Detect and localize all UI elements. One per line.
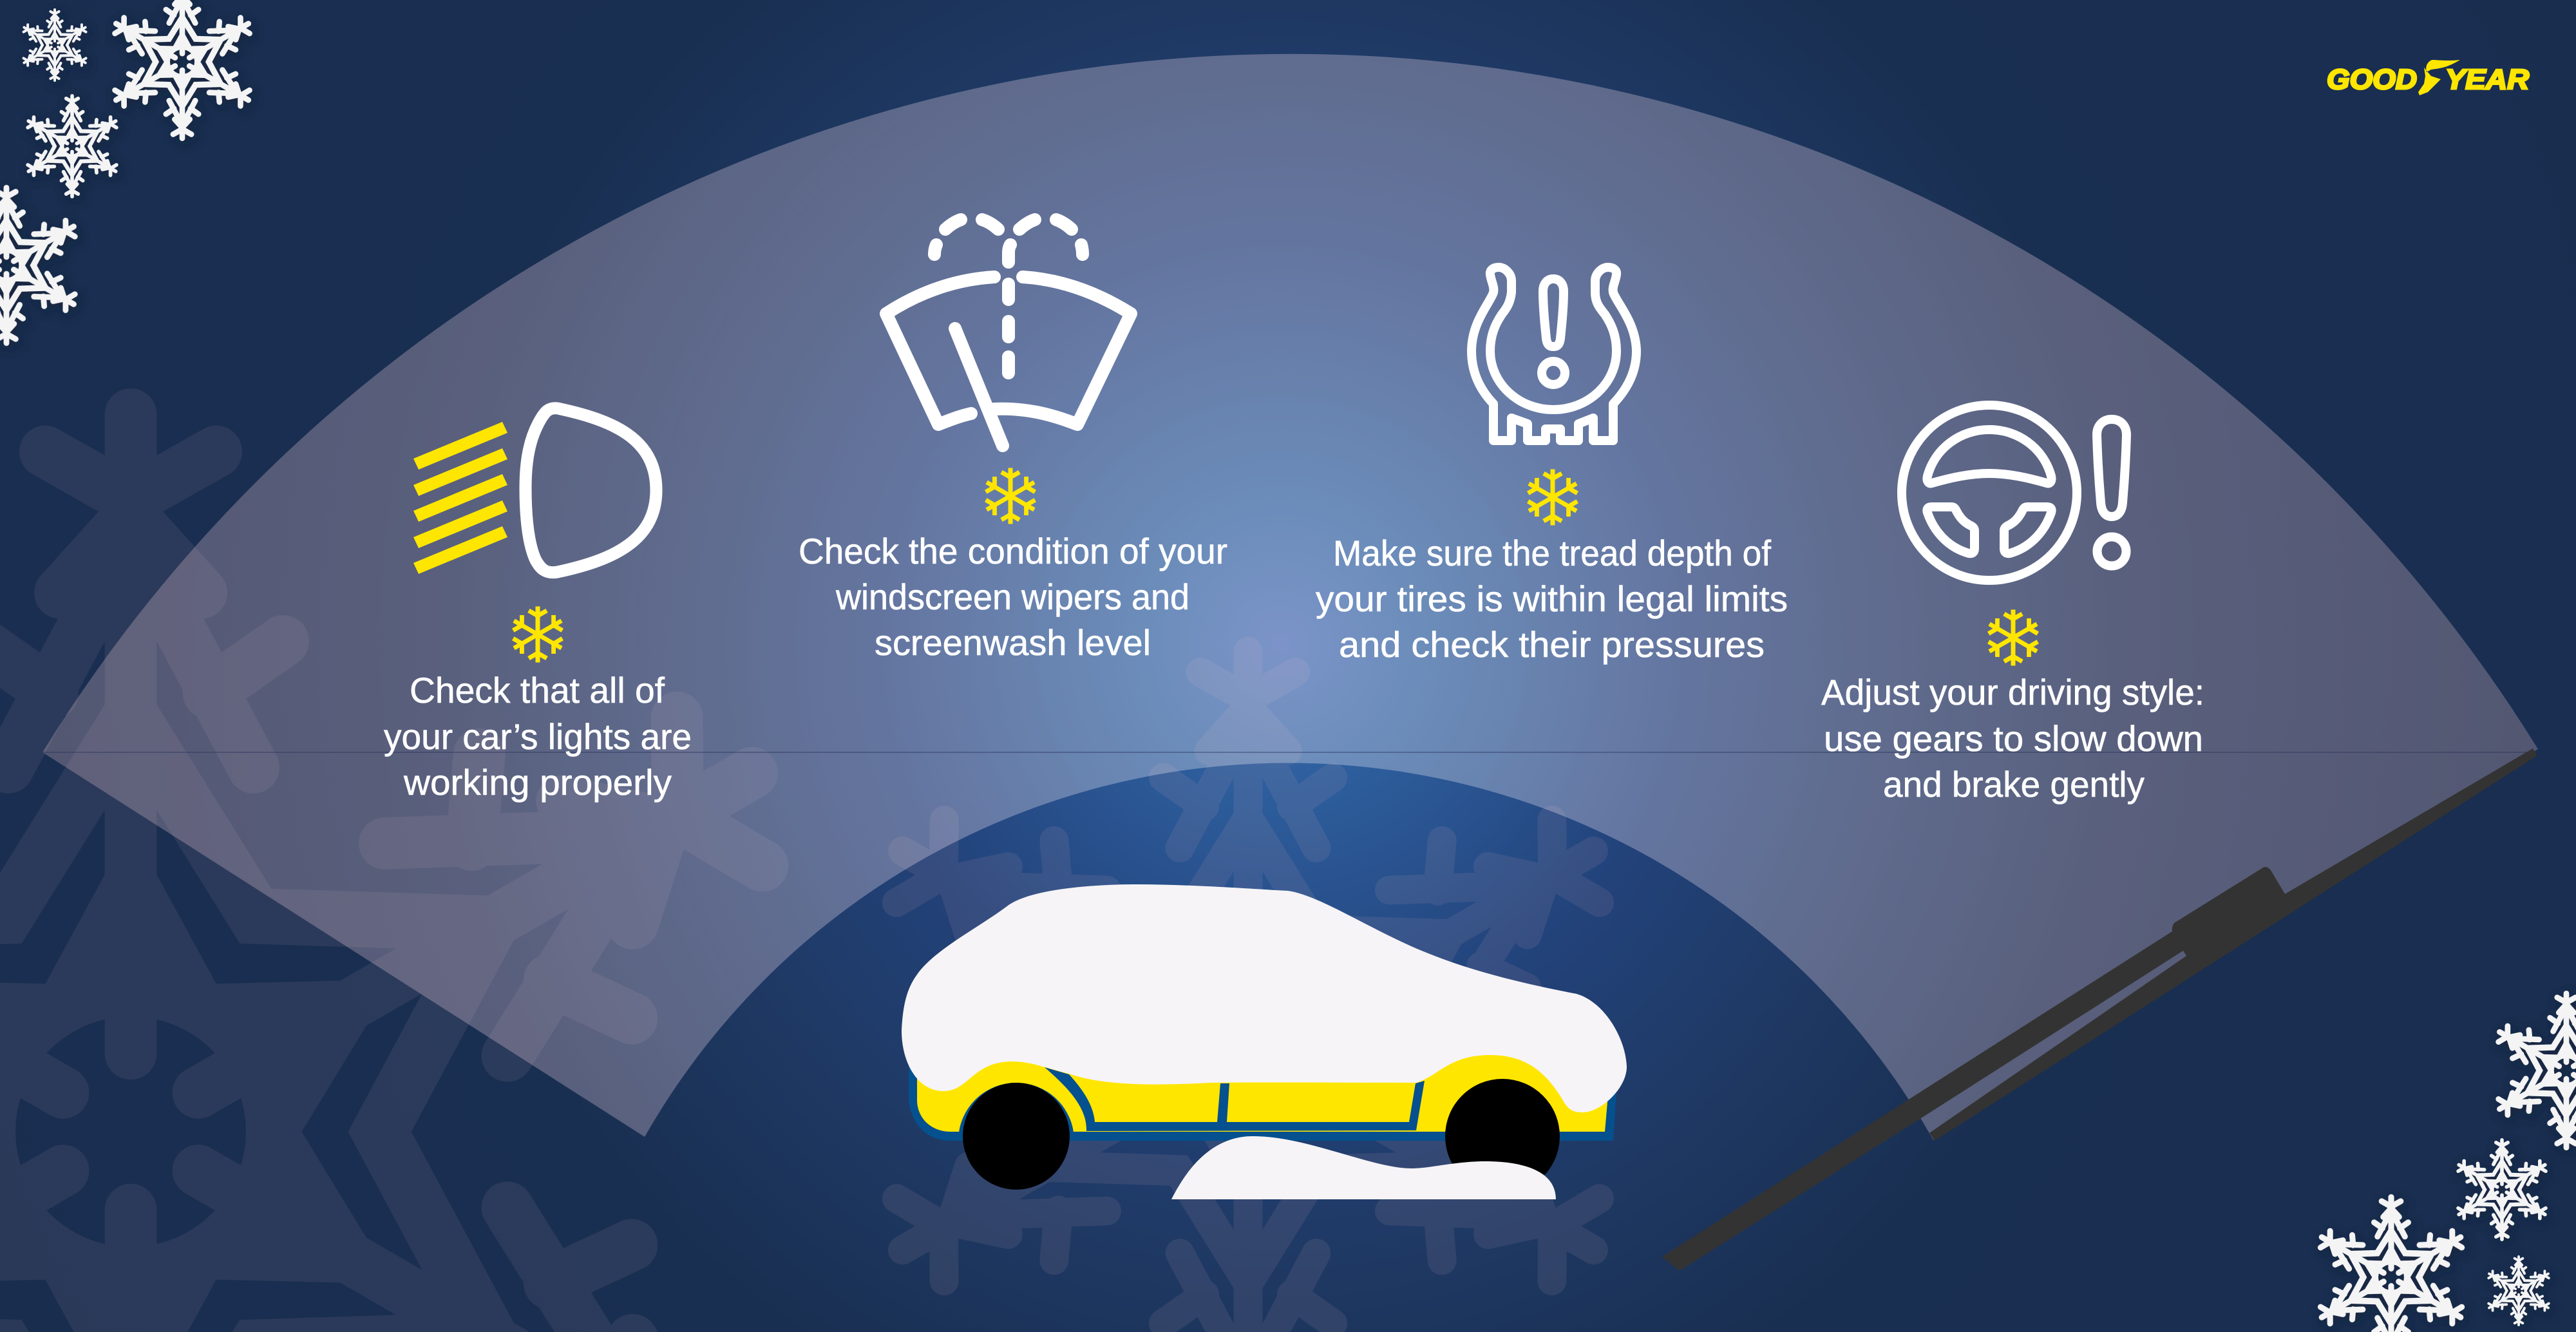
panel: lights check: [384, 408, 692, 803]
panel: driving style: [1821, 405, 2204, 804]
icon: windscreen and wiper: [886, 220, 1131, 446]
wiper sweep area: [43, 54, 2538, 1140]
car body outline: [909, 1056, 1617, 1141]
decorative white snowflakes bottom right: [2317, 991, 2576, 1332]
tyres text: Make sure the tread depth of: [1333, 533, 1771, 573]
snow covered car: [902, 884, 1627, 1199]
icon: steering wheel warning: [1902, 405, 2126, 580]
logo winged foot: [2418, 60, 2460, 95]
front wheel: [963, 1083, 1070, 1190]
wipers text: Check the condition of your: [799, 531, 1227, 571]
snow mound: [1171, 1136, 1556, 1199]
icon: headlight: [526, 408, 656, 573]
icon: tyre pressure warning: [1472, 267, 1636, 441]
tyres text: [1316, 533, 1788, 665]
driving text: Adjust your driving style:: [1821, 672, 2204, 712]
icon: yellow snowflake: [509, 607, 566, 662]
lights text: Check that all of: [410, 670, 665, 710]
wipers text: screenwash level: [875, 622, 1151, 663]
panel: wipers check: [799, 220, 1227, 663]
logo wordmark left: GOOD: [2327, 64, 2417, 95]
tyres text: your tires is within legal limits: [1316, 578, 1788, 619]
driving text: [1821, 672, 2204, 804]
driving text: use gears to slow down: [1824, 718, 2203, 759]
car body yellow: [917, 1043, 1608, 1132]
rear wheel: [1445, 1079, 1560, 1194]
icon: yellow snowflake: [1985, 609, 2041, 666]
tyres text: and check their pressures: [1339, 624, 1765, 665]
Goodyear logo: [2327, 60, 2529, 95]
icon: headlight beams: [413, 422, 507, 574]
large background snowflakes: [0, 388, 1614, 1332]
door frame: [1045, 1067, 1425, 1131]
sweep horizon line: [43, 752, 2534, 753]
icon: yellow snowflake: [982, 468, 1039, 524]
panel: tyres check: [1316, 267, 1788, 665]
wipers text: windscreen wipers and: [835, 576, 1189, 617]
lights text: your car’s lights are: [384, 716, 692, 757]
wipers text: [799, 531, 1227, 663]
decorative white snowflakes top left: [0, 0, 254, 348]
snow on car: [902, 884, 1627, 1112]
icon: yellow snowflake: [1524, 469, 1581, 526]
wiper blade: [1662, 748, 2537, 1271]
driving text: and brake gently: [1883, 764, 2145, 804]
lights text: [384, 670, 692, 803]
front wheel arch: [958, 1083, 1074, 1141]
lights text: working properly: [403, 762, 672, 803]
logo wordmark right: YEAR: [2445, 64, 2529, 95]
